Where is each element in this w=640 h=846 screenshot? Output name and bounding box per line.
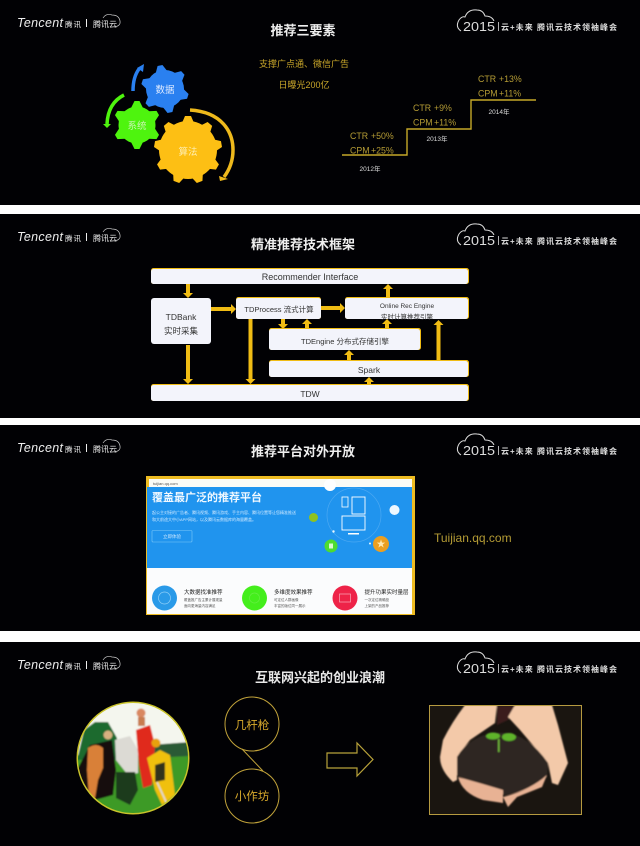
header logo: 2015 summit: [457, 434, 617, 458]
header logo: Tencent: 腾讯云: [93, 444, 117, 454]
title: 互联网兴起的创业浪潮: [255, 670, 385, 685]
feature: big data: 覆盖推广告主累计展现量: [184, 597, 223, 602]
panel: startup wave: [0, 642, 640, 846]
summary text: 日曝光200亿: [278, 79, 330, 90]
header logo: Tencent: 腾讯云: [93, 19, 117, 29]
photo: hands holding soil and seedling: [429, 705, 582, 815]
header logo: Tencent: 腾讯: [65, 661, 82, 671]
website screenshot: tuijian.qq.com: [153, 481, 178, 486]
step chart: CTR: [478, 74, 496, 84]
header logo: Tencent: 腾讯: [65, 444, 82, 454]
screenshot device illustration: [309, 479, 400, 552]
header logo: Tencent: 腾讯: [65, 233, 82, 243]
website url: Tuijian.qq.com: [434, 531, 512, 545]
header logo: Tencent: Tencent: [17, 230, 64, 244]
screenshot button: 立即体验: [163, 533, 181, 540]
box: TDEngine: [269, 328, 421, 350]
feature: realtime: 提升功果实时量层: [364, 588, 409, 596]
header logo: 2015 summit: 云+未来 腾讯云技术领袖峰会: [501, 22, 617, 32]
step chart: +13%: [499, 74, 522, 84]
feature: multi-dimension: 丰富的版位同一展示: [274, 603, 306, 608]
feature: big data: [152, 586, 223, 610]
step chart: 2012年: [360, 164, 381, 173]
screenshot device illustration: ★: [376, 539, 386, 549]
title: 推荐三要素: [270, 23, 336, 38]
label: 几杆枪: 几杆枪: [235, 718, 270, 732]
feature: multi-dimension: 多维度效果推荐: [274, 588, 313, 596]
box: TDBank: 实时采集: [164, 326, 198, 336]
header logo: 2015 summit: 云+未来 腾讯云技术领袖峰会: [501, 664, 617, 674]
gear: algorithm: 算法: [178, 146, 198, 158]
feature: big data: 面向更海量内容满足: [184, 603, 216, 608]
header logo: Tencent: 腾讯: [65, 19, 82, 29]
header logo: 2015 summit: 2015: [463, 443, 495, 458]
feature: multi-dimension: [242, 586, 313, 610]
screenshot description: 和大前途大中小APP网站，以及腾讯云数据库的海量覆盖。: [152, 516, 256, 522]
panel: recommendation framework: [0, 214, 640, 418]
box: TDBank: TDBank: [166, 312, 197, 322]
feature: multi-dimension: 可定位人群画像: [274, 597, 299, 602]
gear: system: 系统: [127, 120, 147, 132]
header logo: 2015 summit: 2015: [463, 661, 495, 676]
header logo: Tencent: [17, 228, 120, 244]
screenshot description: 起公主对接的广告者、腾讯视频、腾讯游戏、手主内容、腾讯位置等让您精准推送: [152, 509, 296, 515]
header logo: Tencent: Tencent: [17, 441, 64, 455]
step chart: +9%: [434, 103, 452, 113]
header logo: Tencent: 腾讯云: [93, 661, 117, 671]
box: Online Rec Engine: 实时计算推荐引擎: [381, 312, 434, 321]
panel: open platform: [0, 425, 640, 631]
header logo: Tencent: Tencent: [17, 658, 64, 672]
box: Recommender Interface: [151, 268, 469, 284]
header logo: 2015 summit: 云+未来 腾讯云技术领袖峰会: [501, 446, 617, 456]
box: Recommender Interface: Recommender Interface: [262, 272, 358, 282]
gear: system: [113, 101, 161, 149]
screenshot description: [152, 509, 296, 522]
step chart: +25%: [371, 146, 394, 156]
box: Online Rec Engine: Online Rec Engine: [380, 303, 434, 310]
header logo: 2015 summit: [457, 224, 617, 248]
box: TDBank: [151, 298, 211, 344]
linked circles: [225, 697, 279, 823]
step chart: 2014年: [489, 107, 510, 116]
summary text: [259, 58, 349, 90]
header logo: Tencent: [17, 14, 120, 30]
label: 小作坊: 小作坊: [235, 789, 270, 803]
box: Spark: [269, 360, 469, 377]
summary text: 支撑广点通、微信广告: [259, 58, 349, 69]
header logo: Tencent: [17, 656, 120, 672]
step chart: CPM: [350, 146, 370, 156]
step chart: 2013年: [427, 134, 448, 143]
box: TDW: TDW: [300, 389, 320, 399]
box: TDEngine: TDEngine 分布式存储引擎: [301, 336, 389, 346]
step chart: CPM: [413, 118, 433, 128]
header logo: 2015 summit: 云+未来 腾讯云技术领袖峰会: [501, 236, 617, 246]
panel: three elements of recommendation: [0, 0, 640, 205]
feature: big data: 大数据找准推荐: [184, 588, 223, 596]
feature: realtime: 一次定位精确投: [364, 597, 389, 602]
screenshot headline: 覆盖最广泛的推荐平台: [152, 490, 262, 504]
gear: algorithm: [153, 116, 223, 184]
arrow: blue arc: [133, 64, 144, 91]
step chart: CPM: [478, 88, 498, 98]
feature: realtime: [332, 586, 409, 610]
website screenshot: [146, 476, 415, 615]
header logo: Tencent: [17, 439, 120, 455]
arrow: outline: [327, 743, 373, 776]
header logo: Tencent: 腾讯云: [93, 233, 117, 243]
header logo: 2015 summit: 2015: [463, 233, 495, 248]
step chart: +11%: [499, 88, 521, 98]
step chart: +50%: [371, 131, 394, 141]
title: 推荐平台对外开放: [251, 444, 355, 459]
arrow: green arc: [103, 95, 124, 128]
step chart: [342, 74, 536, 173]
box: Online Rec Engine: [345, 297, 469, 321]
box: Spark: Spark: [358, 365, 381, 375]
box: TDProcess: [236, 297, 321, 319]
header logo: 2015 summit: 2015: [463, 19, 495, 34]
box: TDProcess: TDProcess 流式计算: [244, 304, 314, 314]
photo: pilgrims in circle: [76, 702, 190, 815]
header logo: 2015 summit: [457, 652, 617, 676]
arrow: yellow arc: [190, 110, 233, 181]
header logo: Tencent: Tencent: [17, 16, 64, 30]
screenshot button: [152, 530, 192, 542]
feature: realtime: 上架的产品推荐: [364, 603, 389, 608]
step chart: CTR: [350, 131, 368, 141]
header logo: 2015 summit: [457, 10, 617, 34]
gear: data: 数据: [155, 84, 175, 96]
flow arrows: [183, 284, 444, 384]
step chart: +11%: [434, 118, 456, 128]
box: TDW: [151, 384, 469, 401]
step chart: CTR: [413, 103, 431, 113]
gear: data: [140, 64, 190, 114]
title: 精准推荐技术框架: [251, 237, 355, 252]
